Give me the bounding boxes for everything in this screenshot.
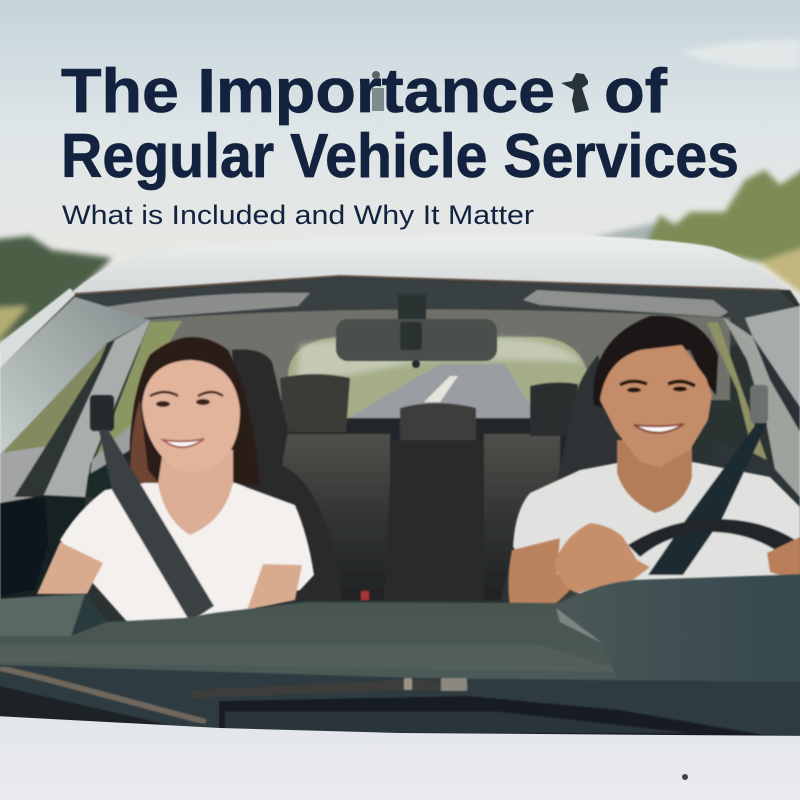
right side window: [707, 322, 767, 460]
header band: [60, 278, 800, 345]
title smudges: [372, 71, 589, 113]
right windshield reflection: [745, 306, 800, 407]
seat belt: [99, 430, 214, 622]
car interior: [0, 276, 800, 640]
left door: [0, 495, 85, 600]
woman passenger: [37, 337, 314, 625]
left windshield reflection: [0, 297, 150, 455]
left pillar: [43, 320, 150, 497]
wiper blades: [0, 668, 470, 722]
dash hump: [556, 574, 800, 685]
ceiling: [140, 309, 730, 400]
rear window: [288, 337, 590, 418]
seat belt anchor: [750, 385, 768, 423]
shirt: [513, 462, 800, 600]
arm: [508, 538, 577, 606]
rear seat headrest right: [530, 382, 578, 436]
dash lower section: [0, 665, 800, 745]
driver seat: [500, 355, 630, 605]
right visor: [523, 290, 728, 317]
car hood: [0, 716, 800, 800]
right door: [712, 440, 800, 560]
arm left: [37, 542, 103, 594]
rear seat headrest centre: [400, 403, 476, 440]
rear seat headrest left: [280, 374, 350, 432]
subtitle: What is Included and Why It Matter: [62, 200, 534, 230]
rear seat centre back: [384, 440, 484, 600]
brows, eyes and smile: [620, 381, 695, 433]
right pillar: [723, 317, 800, 497]
roof edge line: [75, 276, 780, 294]
background: sky and landscape: [0, 0, 800, 350]
shirt: [60, 483, 314, 625]
man driver: [508, 316, 800, 612]
left visor: [100, 293, 310, 319]
rearview mirror: [336, 294, 497, 368]
arm right: [247, 564, 302, 610]
hood speck: [682, 774, 688, 780]
steering wheel: [553, 519, 797, 612]
face: [142, 360, 240, 472]
left side window: [90, 321, 182, 470]
hair: [130, 337, 260, 488]
passenger seat: [232, 350, 342, 600]
seat buckle: [361, 591, 369, 600]
rear seats: [262, 418, 590, 600]
near hand: [555, 523, 650, 593]
far hand: [767, 537, 800, 582]
title: [61, 57, 739, 191]
car body pillar strip: [0, 288, 78, 368]
hair: [593, 316, 718, 408]
title: Regular Vehicle Services: [61, 122, 739, 191]
brows, eyes and smile: [150, 392, 223, 447]
dashboard: [0, 574, 800, 745]
seat belt: [648, 423, 767, 575]
neck: [158, 450, 233, 535]
left dash bump: [0, 594, 107, 636]
car roof: [72, 235, 800, 300]
face: [600, 345, 712, 467]
left door seal: [14, 345, 108, 497]
title: The Importance: [61, 57, 555, 126]
neck: [617, 440, 692, 513]
title: of: [604, 57, 667, 126]
seat belt anchor: [90, 395, 114, 431]
left quarter window: [0, 343, 107, 503]
road at left: [0, 445, 55, 503]
